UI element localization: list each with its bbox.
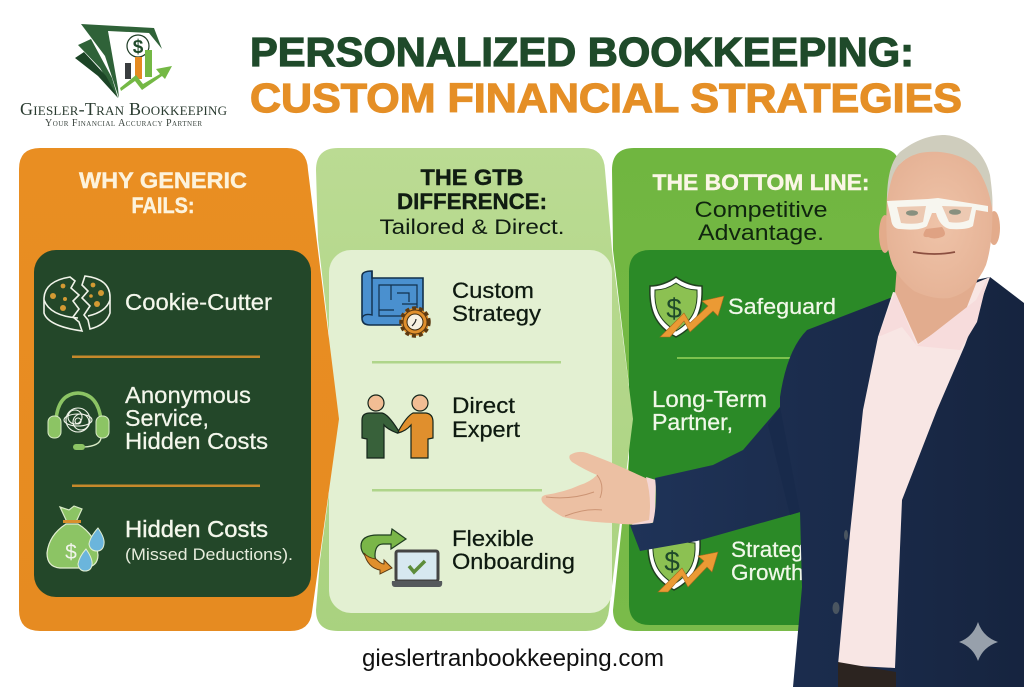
icon: shield with arrow: $ [666, 293, 682, 324]
neck [895, 258, 986, 344]
shirt [838, 277, 990, 668]
jacket [630, 277, 1024, 687]
safeguard label: Safeguard [728, 294, 836, 319]
logo mark: fanned bills: $ [133, 37, 144, 58]
panel background [316, 148, 633, 631]
custom strategy label line 2: Strategy [452, 301, 542, 326]
divider [372, 489, 542, 492]
title line 1: PERSONALIZED BOOKKEEPING: [250, 29, 914, 75]
heading line 1: WHY GENERIC [79, 168, 247, 193]
inner dark green card [629, 250, 900, 625]
glasses [887, 198, 988, 230]
panel background [19, 148, 339, 631]
cookie-cutter label: Cookie-Cutter [125, 289, 272, 315]
panel: the bottom line [612, 148, 900, 631]
direct expert label line 1: Direct [452, 393, 516, 418]
watermark sparkle [959, 622, 998, 661]
missed deductions note: (Missed Deductions). [125, 545, 293, 564]
logo mark: fanned bills [75, 24, 172, 98]
panel: why generic fails [19, 148, 339, 631]
nose [923, 227, 945, 238]
long-term label line 1: Long-Term [652, 386, 767, 412]
icon: headset with tangle [48, 393, 109, 450]
presenter photo illustration [541, 135, 1024, 687]
icon: blueprint with gear [362, 271, 429, 336]
anonymous service label line 1: Anonymous [125, 382, 251, 408]
divider [372, 361, 561, 364]
collar [878, 277, 988, 350]
strategic growth line 1: Strategic [731, 537, 820, 562]
anonymous service label line 3: Hidden Costs [125, 428, 268, 454]
direct expert label line 2: Expert [452, 417, 521, 442]
hair [887, 135, 992, 208]
heading line 2: DIFFERENCE: [397, 189, 547, 214]
strategic growth line 2: Growth [731, 560, 804, 585]
heading: THE BOTTOM LINE: [652, 170, 870, 195]
head [886, 150, 992, 298]
icon: laptop with arrows [361, 529, 442, 587]
website url: gieslertranbookkeeping.com [362, 645, 664, 672]
belt [838, 662, 896, 687]
ears [879, 215, 891, 253]
icon: broken cookie [44, 276, 110, 331]
flexible onboarding label line 2: Onboarding [452, 549, 575, 574]
title [250, 29, 962, 121]
title line 2: CUSTOM FINANCIAL STRATEGIES [250, 75, 962, 121]
divider [677, 357, 817, 359]
heading line 2: FAILS: [132, 193, 194, 218]
icon: shield with arrow, lower [648, 530, 718, 592]
icon: shield with arrow [650, 277, 724, 337]
subheading: Tailored & Direct. [380, 215, 564, 239]
inner dark card [34, 250, 311, 597]
anonymous service label line 2: Service, [125, 405, 209, 431]
icon: leaking money bag [47, 506, 104, 571]
logo [20, 24, 227, 129]
mouth [913, 252, 955, 254]
shirt cuff [632, 477, 656, 528]
divider [72, 356, 260, 358]
jacket buttons [832, 530, 848, 614]
company name: Giesler-Tran Bookkeeping [20, 99, 227, 119]
heading: THE GTB [420, 165, 524, 190]
hand [541, 452, 652, 524]
icon: handshake [362, 395, 433, 458]
flexible onboarding label line 1: Flexible [452, 526, 534, 551]
hidden costs label: Hidden Costs [125, 516, 268, 542]
long-term label line 2: Partner, [652, 409, 733, 435]
divider [72, 484, 260, 487]
icon: shield with arrow, lower: $ [664, 546, 680, 577]
sleeve shading [768, 407, 800, 515]
custom strategy label line 1: Custom [452, 278, 534, 303]
panel background [612, 148, 900, 631]
subheading line 1: Competitive [694, 197, 828, 222]
subheading line 2: Advantage. [698, 220, 824, 245]
tagline: Your Financial Accuracy Partner [45, 118, 202, 129]
icon: leaking money bag: $ [65, 541, 77, 564]
panel: the GTB difference [316, 148, 633, 631]
inner pale card [329, 250, 612, 613]
